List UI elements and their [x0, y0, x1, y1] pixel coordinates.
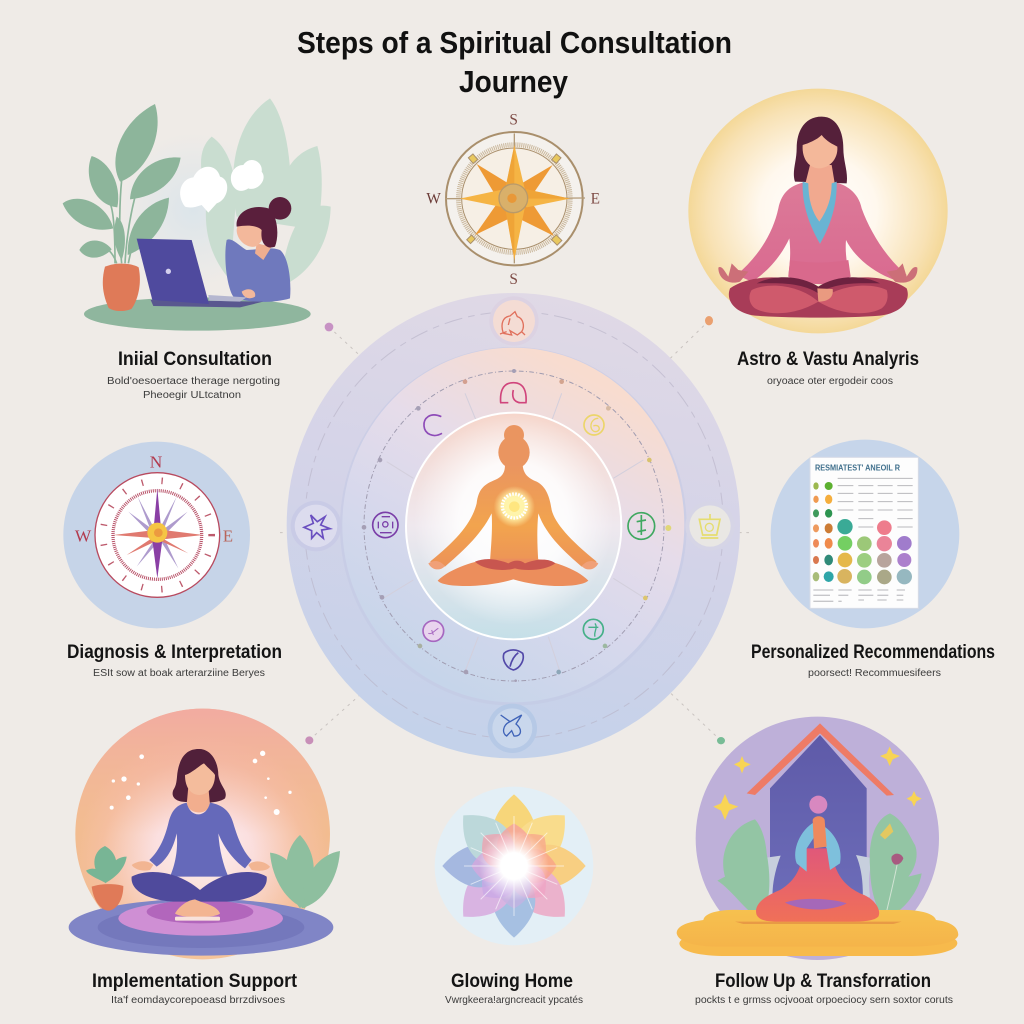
inner disc — [406, 413, 621, 639]
sparkles — [110, 751, 292, 815]
panel: compass top — [426, 111, 600, 288]
compass dial — [446, 132, 583, 265]
report table lines — [813, 478, 913, 601]
house — [770, 735, 867, 900]
crossed legs — [729, 277, 908, 318]
torso and arms — [737, 182, 907, 283]
outer ring — [287, 293, 740, 758]
hands and head — [809, 796, 827, 848]
heading: Astro & Vastu Analyris — [737, 349, 919, 370]
panel: Glowing Home — [435, 787, 593, 1006]
blue disc — [771, 440, 959, 628]
mat pink — [118, 901, 283, 936]
illustration: compass dial on blue disc: W — [75, 526, 92, 545]
middle ring — [340, 347, 687, 706]
hands — [718, 263, 917, 283]
dial star — [113, 488, 203, 578]
right leaves — [270, 835, 340, 908]
blue shawl — [795, 822, 841, 872]
node: right — [685, 501, 735, 551]
title: Journey — [459, 64, 569, 99]
torso and arms — [149, 803, 252, 877]
ground ellipse — [84, 297, 311, 331]
blue scarf — [803, 182, 837, 244]
compass letters — [426, 111, 600, 288]
illustration: figure before house — [677, 717, 958, 960]
dial letters: N — [150, 452, 163, 471]
spoke lines — [383, 393, 645, 672]
neck and chest — [804, 165, 835, 225]
right leaf — [870, 813, 922, 919]
compass letters: W — [426, 190, 441, 207]
pointer lines — [445, 133, 585, 263]
illustration: compass dial on blue disc: E — [223, 526, 233, 545]
heading: Glowing Home — [451, 971, 573, 992]
laptop — [137, 239, 263, 307]
compass letters: E — [591, 190, 600, 207]
illustration: woman meditating on mat — [69, 709, 340, 959]
report heading: RESMIATEST' ANEOIL R — [815, 463, 900, 473]
blue disc — [63, 442, 250, 628]
heading: Diagnosis & Interpretation — [67, 642, 282, 663]
left leaf — [717, 819, 769, 920]
compass letters: S — [509, 271, 518, 288]
illustration: report on blue disc — [771, 440, 959, 628]
hands — [132, 861, 270, 871]
zodiac symbols — [373, 383, 655, 670]
heading: Implementation Support — [92, 971, 298, 992]
gradient disc — [75, 709, 330, 959]
illustration: woman in meditation with halo — [688, 89, 948, 333]
outer dashed track — [305, 312, 723, 738]
description — [107, 376, 280, 401]
description: pockts t e grmss ocjvooat orpoeciocy sern soxtor coruts — [695, 995, 953, 1006]
robe fold — [785, 899, 847, 910]
description: poorsect! Recommuesifeers — [808, 668, 941, 679]
roof — [747, 723, 894, 796]
pale disc — [435, 787, 593, 945]
paper — [810, 457, 918, 608]
figure robe and legs — [756, 848, 879, 922]
meditating figure silhouette — [428, 425, 598, 586]
ring clasps — [467, 154, 562, 245]
neck — [187, 787, 210, 812]
mat outer — [69, 899, 333, 956]
description: Ita'f eomdaycorepoeasd brrzdivsoes — [111, 995, 285, 1006]
inner glow — [414, 415, 614, 625]
node: top — [489, 296, 539, 346]
panel: Initial Consultation — [63, 98, 331, 401]
dashed zodiac track — [364, 371, 664, 681]
stars — [713, 747, 922, 820]
dial — [95, 473, 220, 597]
feet — [175, 899, 220, 917]
illustration: glowing flower — [435, 787, 593, 945]
panel: Follow Up & Transformation — [677, 717, 958, 1006]
small potted plant — [86, 846, 127, 911]
thought clouds — [180, 160, 264, 213]
pot — [103, 264, 140, 311]
light rays — [464, 816, 564, 916]
face — [803, 135, 837, 168]
panel: Implementation Support — [69, 709, 340, 1006]
description: Pheoegir ULtcatnon — [143, 390, 241, 401]
panel: Personalized Recommendations — [751, 440, 995, 679]
outer petals — [442, 794, 586, 938]
compass hub — [499, 184, 528, 213]
base cushion — [677, 910, 958, 956]
heading: Follow Up & Transforration — [715, 971, 931, 992]
dotted inner ring — [458, 145, 570, 253]
background leaves — [201, 98, 331, 287]
heading: Iniial Consultation — [118, 349, 272, 370]
connector lines and dots — [280, 316, 750, 744]
node: left — [291, 501, 341, 551]
inner petals — [471, 823, 557, 909]
woman — [225, 197, 291, 302]
panel: Astro & Vastu Analysis — [688, 89, 948, 387]
description: Bold'oesoertace therage nergoting — [107, 376, 280, 387]
hair — [794, 117, 847, 183]
centre glow — [479, 831, 549, 901]
hair — [173, 749, 226, 803]
halo — [688, 89, 948, 333]
node: bottom — [488, 704, 537, 753]
middle disc — [342, 348, 684, 702]
compass star — [460, 145, 570, 260]
panel: Diagnosis & Interpretation — [63, 442, 282, 679]
side columns — [762, 855, 873, 900]
lavender disc — [696, 717, 939, 960]
dial ticks — [113, 491, 202, 579]
compass letters: S — [509, 111, 518, 128]
illustration: woman at laptop with plant — [63, 98, 331, 331]
illustration: compass dial on blue disc — [63, 442, 250, 628]
bud and sparkle on leaf — [880, 823, 903, 918]
title: Steps of a Spiritual Consultation — [297, 25, 732, 60]
face — [185, 763, 215, 795]
panel: central mandala wheel — [280, 293, 750, 758]
track markers — [362, 369, 671, 682]
colour dots — [813, 482, 912, 584]
plant — [63, 104, 181, 263]
crossed legs — [132, 872, 267, 902]
description: oryoace oter ergodeir coos — [767, 376, 893, 387]
title — [297, 25, 732, 99]
description: Vwrgkeera!argncreacit ypcatés — [445, 995, 583, 1006]
description: ESIt sow at boak arterarziine Beryes — [93, 668, 265, 679]
